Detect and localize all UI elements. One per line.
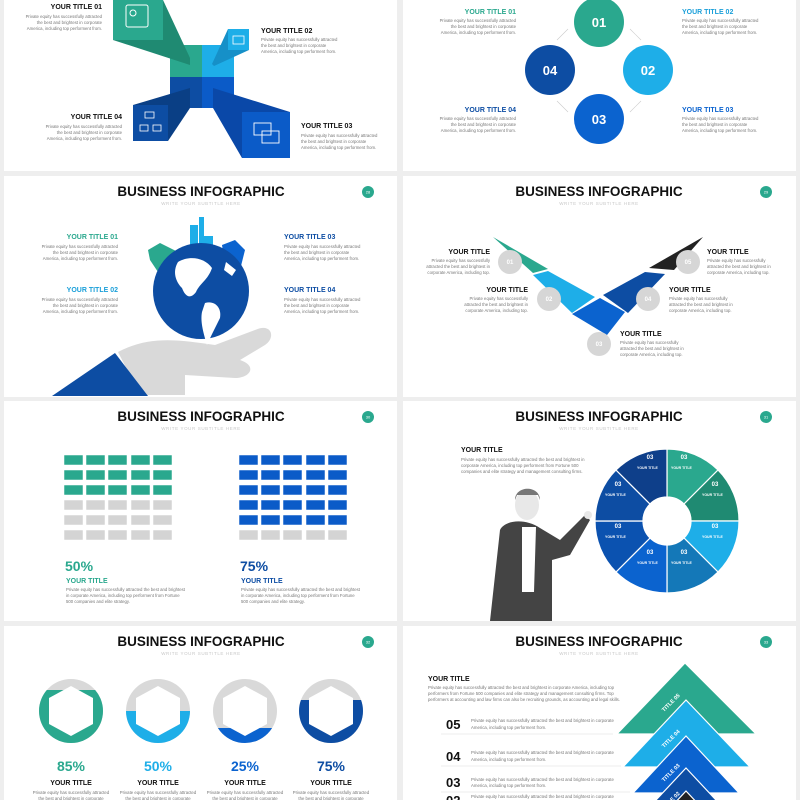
- donut labels: 03: [681, 550, 688, 556]
- text 04: [46, 114, 123, 141]
- text 01: YOUR TITLE 01: [67, 234, 118, 241]
- gauge 50%: [126, 679, 190, 743]
- text 05: [707, 249, 771, 275]
- donut labels: YOUR TITLE: [671, 561, 692, 565]
- sleeve: [52, 353, 148, 396]
- text 03: Private equity has successfully attracted: [301, 133, 378, 138]
- donut labels: YOUR TITLE: [637, 561, 658, 565]
- text 03: Private equity has successfully attracted: [284, 244, 361, 249]
- text 04: America, including top performent from.: [441, 128, 516, 133]
- donut labels: 03: [712, 524, 719, 530]
- text 02: [682, 9, 759, 35]
- circle 02: [623, 45, 673, 95]
- text 02: the best and brightest in corporate: [261, 43, 327, 48]
- text 01: attracted the best and brightest in: [426, 264, 491, 269]
- heading: BUSINESS INFOGRAPHIC: [515, 409, 683, 424]
- gauge labels: 25%: [231, 758, 260, 774]
- gauge 75%: [299, 679, 363, 743]
- intro text: corporate America, including top performent from Fortune 500: [461, 463, 579, 468]
- badge: [362, 186, 374, 198]
- text 04: [284, 287, 361, 314]
- text 05: corporate America, including top.: [707, 270, 770, 275]
- gauge 85%: [39, 679, 103, 743]
- stat 50%: 500 companies and elite strategy.: [66, 599, 130, 604]
- text 02: Private equity has successfully attracted: [682, 18, 759, 23]
- text 03: YOUR TITLE 03: [682, 107, 733, 114]
- text 04: the best and brightest in corporate: [451, 122, 517, 127]
- row 05: 05: [446, 717, 460, 732]
- buildings: [148, 217, 245, 275]
- heading: WRITE YOUR SUBTITLE HERE: [161, 426, 241, 431]
- circle 02: 02: [641, 63, 655, 78]
- text 01: corporate America, including top.: [427, 270, 490, 275]
- text 02: [42, 287, 119, 314]
- money grid right: [239, 455, 347, 540]
- text 02: America, including top performent from.: [261, 49, 336, 54]
- row 03: America, including top performent from.: [471, 783, 546, 788]
- hand: [118, 328, 271, 395]
- heading: WRITE YOUR SUBTITLE HERE: [161, 651, 241, 656]
- donut labels: YOUR TITLE: [605, 535, 626, 539]
- text 01: [42, 234, 119, 261]
- text 02: YOUR TITLE 02: [261, 28, 312, 35]
- heading: BUSINESS INFOGRAPHIC: [117, 184, 285, 199]
- text 01: Private equity has successfully attracted: [42, 244, 119, 249]
- pyramid: [617, 663, 756, 800]
- text 04: America, including top performent from.: [47, 136, 122, 141]
- gauge labels: YOUR TITLE: [224, 780, 266, 787]
- stat 75%: YOUR TITLE: [241, 578, 283, 585]
- text 02: the best and brightest in corporate: [682, 24, 748, 29]
- pyramid labels: TITLE 03: [661, 763, 682, 783]
- gauge labels: YOUR TITLE: [50, 780, 92, 787]
- text 03: [620, 331, 684, 357]
- panel: slide 4 V shape: 01: [507, 260, 514, 266]
- circle 01: [574, 0, 624, 47]
- stat 50%: Private equity has successfully attracted the best and brightest: [66, 587, 186, 592]
- text 02: [464, 287, 529, 313]
- gauge labels: YOUR TITLE: [310, 780, 352, 787]
- text 02: the best and brightest in corporate: [53, 303, 119, 308]
- gauge labels: Private equity has successfully attracted: [33, 790, 110, 795]
- donut labels: [605, 455, 723, 565]
- text 03: the best and brightest in corporate: [284, 250, 350, 255]
- text 04: Private equity has successfully: [669, 296, 728, 301]
- text 05: YOUR TITLE: [707, 249, 749, 256]
- text 04: attracted the best and brightest in: [669, 302, 733, 307]
- text 03: the best and brightest in corporate: [682, 122, 748, 127]
- text 02: YOUR TITLE 02: [682, 9, 733, 16]
- text 03: corporate America, including top.: [620, 352, 683, 357]
- text 05: Private equity has successfully: [707, 258, 766, 263]
- arm 04: [133, 88, 190, 141]
- text 03: [301, 123, 378, 150]
- donut labels: YOUR TITLE: [671, 466, 692, 470]
- text 02: [261, 28, 338, 54]
- arm 01: [113, 0, 190, 65]
- text 03: America, including top performent from.: [284, 256, 359, 261]
- heading: [515, 634, 683, 656]
- heading: BUSINESS INFOGRAPHIC: [117, 634, 285, 649]
- circle 01: 01: [592, 15, 606, 30]
- circle 04: [525, 45, 575, 95]
- heading: BUSINESS INFOGRAPHIC: [515, 184, 683, 199]
- row 02: Private equity has successfully attracted the best and brightest in corporate: [471, 794, 614, 799]
- intro: YOUR TITLE: [428, 676, 470, 683]
- donut labels: 03: [681, 455, 688, 461]
- stat 75%: 500 companies and elite strategy.: [241, 599, 305, 604]
- gauge labels: [33, 758, 370, 800]
- intro text: companies and elite strategy and management consulting firms.: [461, 469, 583, 474]
- number circles: [498, 250, 700, 356]
- gauge labels: YOUR TITLE: [137, 780, 179, 787]
- row 03: Private equity has successfully attracted the best and brightest in corporate: [471, 777, 614, 782]
- text 01: America, including top performent from.: [27, 26, 102, 31]
- V pieces: [493, 237, 703, 335]
- text 03: the best and brightest in corporate: [301, 139, 367, 144]
- panel: slide 4 V shape: 02: [546, 297, 553, 303]
- text 01: Private equity has successfully attracted: [440, 18, 517, 23]
- text 01: Private equity has successfully: [431, 258, 491, 263]
- stat 50%: YOUR TITLE: [66, 578, 108, 585]
- row 05: America, including top performent from.: [471, 725, 546, 730]
- panel: slide 6 donut: [461, 409, 772, 621]
- heading: [117, 409, 285, 431]
- badge: 32: [366, 640, 371, 644]
- text 03: YOUR TITLE 03: [301, 123, 352, 130]
- arm 03: [213, 88, 290, 158]
- gauge labels: Private equity has successfully attracted: [207, 790, 284, 795]
- text 02: Private equity has successfully attracted: [261, 37, 338, 42]
- text 04: YOUR TITLE 04: [71, 114, 122, 121]
- donut labels: 03: [647, 550, 654, 556]
- intro text: Private equity has successfully attracted the best and brightest in: [461, 457, 585, 462]
- panel: slide 8 pyramid: [428, 634, 772, 800]
- row 04: [441, 749, 621, 766]
- circle 03: 03: [592, 112, 606, 127]
- text 04: Private equity has successfully attracted: [440, 116, 517, 121]
- center square: [170, 45, 234, 108]
- donut labels: YOUR TITLE: [702, 493, 723, 497]
- heading: [515, 409, 683, 431]
- pyramid labels: TITLE 05: [661, 693, 682, 713]
- donut labels: YOUR TITLE: [702, 535, 723, 539]
- text 01: YOUR TITLE 01: [51, 4, 102, 11]
- panel: slide 3 globe: [42, 184, 374, 396]
- text 01: America, including top performent from.: [441, 30, 516, 35]
- text 02: America, including top performent from.: [43, 309, 118, 314]
- intro text: YOUR TITLE: [461, 447, 503, 454]
- badge: 31: [764, 414, 769, 420]
- text 04: YOUR TITLE 04: [465, 107, 516, 114]
- text 01: the best and brightest in corporate: [451, 24, 517, 29]
- panel: slide 4 V shape: [426, 184, 772, 357]
- heading: [117, 634, 285, 656]
- text 03: [682, 107, 759, 133]
- text 04: YOUR TITLE 04: [284, 287, 335, 294]
- row 04: America, including top performent from.: [471, 757, 546, 762]
- globe: [153, 243, 249, 345]
- money grid left: [64, 455, 172, 540]
- donut labels: 03: [615, 524, 622, 530]
- badge: [362, 411, 374, 423]
- text 01: Private equity has successfully attracted: [26, 14, 103, 19]
- donut labels: 03: [615, 482, 622, 488]
- donut labels: YOUR TITLE: [637, 466, 658, 470]
- text 01: the best and brightest in corporate: [53, 250, 119, 255]
- text 05: attracted the best and brightest in: [707, 264, 771, 269]
- text 02: YOUR TITLE 02: [67, 287, 118, 294]
- badge: [362, 636, 374, 648]
- panel: slide 4 V shape: 04: [645, 297, 652, 303]
- row 05: [441, 717, 614, 734]
- arrows: [557, 29, 641, 112]
- gauge 25%: [213, 679, 277, 743]
- intro: Private equity has successfully attracted the best and brightest in corporate America, including top: [428, 685, 615, 690]
- panel: slide 7 hexagon gauges: [33, 634, 374, 800]
- text 03: [284, 234, 361, 261]
- text 03: America, including top performent from.: [682, 128, 757, 133]
- stat 75%: in corporate America, including top performent from Fortune: [241, 593, 355, 598]
- row 03: 03: [446, 775, 460, 790]
- circle 03: [574, 94, 624, 144]
- heading: [515, 184, 683, 206]
- badge: 33: [764, 640, 769, 644]
- circle 04: 04: [543, 63, 558, 78]
- text 02: attracted the best and brightest in: [464, 302, 529, 307]
- heading: WRITE YOUR SUBTITLE HERE: [161, 201, 241, 206]
- man: [490, 489, 592, 621]
- text 04: the best and brightest in corporate: [57, 130, 123, 135]
- donut labels: YOUR TITLE: [605, 493, 626, 497]
- gauge labels: 85%: [57, 758, 86, 774]
- text 04: America, including top performent from.: [284, 309, 359, 314]
- intro text: [461, 447, 585, 474]
- row 04: 04: [446, 749, 461, 764]
- gauge labels: 50%: [144, 758, 173, 774]
- text 01: the best and brightest in corporate: [37, 20, 103, 25]
- panel: slide 1 cross: [26, 0, 378, 158]
- intro: [428, 676, 620, 702]
- donut labels: 03: [712, 482, 719, 488]
- donut: [595, 449, 739, 593]
- text 01: YOUR TITLE 01: [465, 9, 516, 16]
- text 04: Private equity has successfully attracted: [46, 124, 123, 129]
- badge: [760, 411, 772, 423]
- text 04: [669, 287, 733, 313]
- gauge labels: 75%: [317, 758, 346, 774]
- text 02: Private equity has successfully attracted: [42, 297, 119, 302]
- text 02: corporate America, including top.: [465, 308, 528, 313]
- panel: slide 2 cycle: [440, 0, 759, 144]
- panel: slide 5 money: [64, 409, 374, 604]
- badge: [760, 636, 772, 648]
- text 01: YOUR TITLE: [448, 249, 490, 256]
- text 01: [426, 249, 491, 275]
- stat 50%: [65, 558, 186, 604]
- text 03: attracted the best and brightest in: [620, 346, 684, 351]
- text 03: YOUR TITLE 03: [284, 234, 335, 241]
- badge: 29: [764, 190, 769, 194]
- panel: slide 4 V shape: 05: [685, 260, 692, 266]
- intro: performers at accounting and law firms can also be recruiting grounds, as accounting and legal skills.: [428, 697, 620, 702]
- text 02: Private equity has successfully: [469, 296, 529, 301]
- donut labels: 03: [647, 455, 654, 461]
- stat 50%: 50%: [65, 558, 94, 574]
- text 01: America, including top performent from.: [43, 256, 118, 261]
- gauge labels: Private equity has successfully attracted: [120, 790, 197, 795]
- heading: WRITE YOUR SUBTITLE HERE: [559, 426, 639, 431]
- text 03: America, including top performent from.: [301, 145, 376, 150]
- heading: BUSINESS INFOGRAPHIC: [117, 409, 285, 424]
- gauge labels: Private equity has successfully attracted: [293, 790, 370, 795]
- badge: 28: [366, 190, 371, 194]
- text 02: YOUR TITLE: [486, 287, 528, 294]
- heading: WRITE YOUR SUBTITLE HERE: [559, 201, 639, 206]
- badge: 30: [366, 414, 371, 420]
- heading: BUSINESS INFOGRAPHIC: [515, 634, 683, 649]
- text 02: America, including top performent from.: [682, 30, 757, 35]
- pyramid labels: TITLE 04: [661, 728, 682, 749]
- text 04: Private equity has successfully attracted: [284, 297, 361, 302]
- arm 02: [212, 29, 249, 66]
- text 03: Private equity has successfully: [620, 340, 679, 345]
- text 04: the best and brightest in corporate: [284, 303, 350, 308]
- heading: WRITE YOUR SUBTITLE HERE: [559, 651, 639, 656]
- row 03: [441, 775, 630, 792]
- stat 75%: Private equity has successfully attracted the best and brightest: [241, 587, 361, 592]
- text 03: YOUR TITLE: [620, 331, 662, 338]
- text 03: Private equity has successfully attracted: [682, 116, 759, 121]
- panel: slide 4 V shape: 03: [596, 342, 603, 348]
- stat 75%: 75%: [240, 558, 269, 574]
- stat 75%: [240, 558, 361, 604]
- intro: performers from Fortune 500 companies and elite strategy and management consulting firms. Top: [428, 691, 614, 696]
- text 01: [26, 4, 103, 31]
- badge: [760, 186, 772, 198]
- stat 50%: in corporate America, including top performent from Fortune: [66, 593, 180, 598]
- row 05: Private equity has successfully attracted the best and brightest in corporate: [471, 718, 614, 723]
- row 02: [446, 793, 614, 800]
- text 04: corporate America, including top.: [669, 308, 732, 313]
- heading: [117, 184, 285, 206]
- row 04: Private equity has successfully attracted the best and brightest in corporate: [471, 750, 614, 755]
- text 01: [440, 9, 517, 35]
- pyramid labels: [661, 693, 682, 800]
- text 04: [440, 107, 517, 133]
- text 04: YOUR TITLE: [669, 287, 711, 294]
